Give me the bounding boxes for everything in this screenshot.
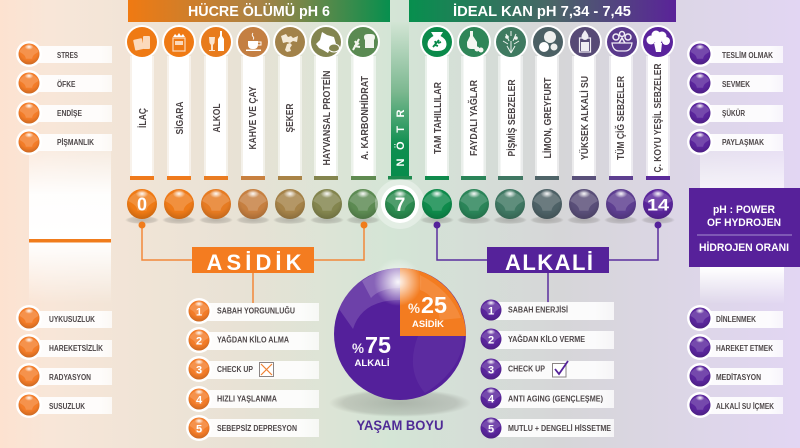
item: şükür: ŞÜKÜR — [722, 109, 745, 118]
acidic food columns — [130, 56, 376, 180]
panel: pH definition: OF HYDROJEN — [707, 217, 781, 229]
icon: citrus — [531, 25, 565, 59]
neutral column — [388, 22, 412, 180]
item 1: 1 — [196, 306, 202, 318]
item 1 — [186, 298, 319, 324]
column: şeker — [278, 56, 302, 180]
icon: broccoli — [641, 25, 675, 59]
item 1: SABAH YORGUNLUĞU — [217, 306, 295, 316]
label: 25 percent: % — [408, 300, 421, 316]
item 2: YAĞDAN KİLO VERME — [508, 335, 586, 344]
item: radyasyon: RADYASYON — [49, 373, 91, 382]
ball 4 — [273, 189, 307, 224]
item: pişmanlık: PİŞMANLIK — [57, 138, 94, 147]
panel: pH definition — [689, 188, 800, 267]
label: asidik — [192, 247, 314, 275]
column: sigara — [167, 56, 191, 180]
label: 25 percent: ASİDİK — [412, 319, 444, 330]
icon: cow and meat — [309, 25, 343, 59]
panel: left stress backdrop — [29, 150, 111, 304]
column: alkol: ALKOL — [211, 103, 223, 133]
item 4 — [480, 388, 614, 408]
icon: water glass — [568, 25, 602, 59]
item 2: 2 — [196, 336, 202, 348]
column: sigara: SİGARA — [173, 101, 186, 134]
ball 14 — [641, 189, 675, 224]
column: şeker: ŞEKER — [284, 103, 296, 132]
icon: grain sack — [420, 25, 454, 59]
item: dinlenmek: DİNLENMEK — [716, 315, 756, 324]
item: hareketsizlik: HAREKETSİZLİK — [49, 344, 103, 353]
column: alkol — [204, 56, 228, 180]
ball 9 — [457, 189, 491, 224]
item 5: 5 — [196, 424, 202, 436]
header: cell death: HÜCRE ÖLÜMÜ pH 6 — [188, 3, 330, 20]
sphere shadow — [329, 389, 471, 417]
alkaline benefits list — [480, 300, 614, 438]
item 2: YAĞDAN KİLO ALMA — [217, 336, 289, 344]
label: 25 percent — [408, 292, 447, 330]
column: pişmiş sebzeler: PİŞMİŞ SEBZELER — [505, 79, 518, 156]
icon: candy — [273, 25, 307, 59]
item 2: 2 — [488, 334, 494, 346]
icon: oil bottle and olives — [457, 25, 491, 59]
item 3: 3 — [196, 364, 202, 376]
item: uykusuzluk: UYKUSUZLUK — [49, 315, 95, 324]
icon: pills — [125, 25, 159, 59]
column: kahve ve çay: KAHVE VE ÇAY — [247, 86, 259, 150]
icon: coffee cup — [236, 25, 270, 59]
item 5: MUTLU + DENGELİ HİSSETME — [508, 424, 612, 433]
item 1 — [480, 300, 614, 320]
item: meditasyon: MEDİTASYON — [716, 373, 761, 382]
item: endişe: ENDİŞE — [57, 109, 83, 118]
panel: pH definition: pH : POWER — [713, 204, 775, 216]
icon: salad bowl — [605, 25, 639, 59]
item: susuzluk: SUSUZLUK — [49, 402, 85, 411]
item 5 — [480, 418, 614, 438]
label: 75 percent: % — [352, 340, 365, 356]
ball 7 neutral — [375, 179, 425, 229]
ball 12 — [567, 189, 601, 224]
column: koyu yeşil sebzeler — [646, 56, 670, 180]
ball 13 — [604, 189, 638, 224]
column: koyu yeşil sebzeler: Ç. KOYU YEŞİL SEBZELER — [651, 63, 664, 172]
item 1: 1 — [488, 306, 494, 318]
ball 8 — [420, 189, 454, 224]
item 3 — [186, 356, 319, 382]
column: yüksek alkali su: YÜKSEK ALKALİ SU — [578, 76, 591, 160]
column: hayvansal protein — [314, 56, 338, 180]
item 3 — [480, 358, 614, 380]
acidic symptoms list — [186, 298, 319, 441]
label: 75 percent: ALKALİ — [354, 358, 390, 369]
label: 25 percent: 25 — [421, 292, 447, 318]
left top list — [16, 41, 112, 155]
item 2 — [480, 328, 614, 350]
item 3: CHECK UP — [217, 365, 254, 374]
item 5 — [186, 415, 319, 441]
column: tam tahıllılar: TAM TAHILLILAR — [432, 82, 444, 154]
column: ilaç — [130, 56, 154, 180]
item 4: 4 — [196, 394, 203, 406]
ball 0 — [125, 189, 159, 224]
ball 5 — [310, 189, 344, 224]
alkaline food columns — [425, 56, 670, 180]
column: hayvansal protein: HAYVANSAL PROTEİN — [320, 70, 333, 166]
ball 11 — [530, 189, 564, 224]
header: ideal blood: İDEAL KAN pH 7,34 - 7,45 — [453, 3, 631, 20]
pH scale balls — [125, 179, 675, 229]
item 4: 4 — [488, 394, 495, 406]
column: yüksek alkali su — [572, 56, 596, 180]
panel: right backdrop — [700, 150, 784, 304]
ball 7 neutral: 7 — [395, 195, 405, 216]
icon: cooked vegetables — [494, 25, 528, 59]
icon: cigarettes — [162, 25, 196, 59]
item 4 — [186, 386, 319, 412]
item: stres: STRES — [57, 51, 79, 60]
right top list — [687, 41, 783, 155]
ball 10 — [493, 189, 527, 224]
connector: alkaline — [434, 222, 662, 303]
label: alkali: ALKALİ — [505, 250, 593, 275]
column: karbonhidrat: A. KARBONHİDRAT — [358, 76, 371, 160]
right bottom list — [687, 305, 783, 418]
item 4: HIZLI YAŞLANMA — [217, 394, 277, 404]
column: limon greyfurt — [535, 56, 559, 180]
label: 75 percent: 75 — [365, 332, 391, 358]
label: 75 percent — [352, 332, 391, 369]
ball 2 — [199, 189, 233, 224]
label: asidik: ASİDİK — [206, 250, 302, 275]
label: alkali — [487, 247, 609, 275]
neutral column: N Ö T R — [394, 109, 407, 166]
item 4: ANTI AGING (GENÇLEŞME) — [508, 394, 603, 404]
icon: bread and wheat — [346, 25, 380, 59]
column: faydalı yağlar: FAYDALI YAĞLAR — [467, 80, 480, 156]
column: limon greyfurt: LİMON, GREYFURT — [541, 77, 554, 158]
icon: wine and bottle — [199, 25, 233, 59]
chart: 75/25 sphere — [334, 258, 466, 400]
ball 6 — [346, 189, 380, 224]
column: kahve ve çay — [241, 56, 265, 180]
header: ideal blood — [409, 0, 676, 22]
ball 3 — [236, 189, 270, 224]
column: tüm çiğ sebzeler: TÜM ÇİĞ SEBZELER — [614, 76, 627, 160]
column: karbonhidrat — [351, 56, 376, 180]
item: teslim olmak: TESLİM OLMAK — [722, 51, 773, 60]
item 5: 5 — [488, 424, 494, 436]
left bottom list — [16, 305, 112, 418]
column: pişmiş sebzeler — [498, 56, 523, 180]
column: faydalı yağlar — [461, 56, 486, 180]
item 3: CHECK UP — [508, 364, 546, 374]
item 5: SEBEPSİZ DEPRESYON — [217, 424, 297, 433]
connector: acidic — [138, 222, 368, 303]
ball 14: 14 — [647, 196, 670, 214]
column: ilaç: İLAÇ — [136, 108, 149, 128]
ball 1 — [162, 189, 196, 224]
item 1: SABAH ENERJİSİ — [508, 306, 568, 314]
item 3: 3 — [488, 364, 494, 376]
item: öfke: ÖFKE — [57, 80, 76, 89]
ball 0: 0 — [137, 194, 147, 214]
item: alkali su içmek: ALKALİ SU İÇMEK — [716, 402, 774, 411]
item: sevmek: SEVMEK — [722, 80, 750, 89]
item 2 — [186, 327, 319, 353]
item: hareket etmek: HAREKET ETMEK — [716, 344, 773, 353]
column: tüm çiğ sebzeler — [609, 56, 633, 180]
caption: yaşam boyu: YAŞAM BOYU — [356, 417, 444, 433]
item: paylaşmak: PAYLAŞMAK — [722, 138, 764, 147]
panel: pH definition: HİDROJEN ORANI — [699, 241, 789, 254]
column: tam tahıllılar — [425, 56, 449, 180]
header: cell death — [128, 0, 390, 22]
